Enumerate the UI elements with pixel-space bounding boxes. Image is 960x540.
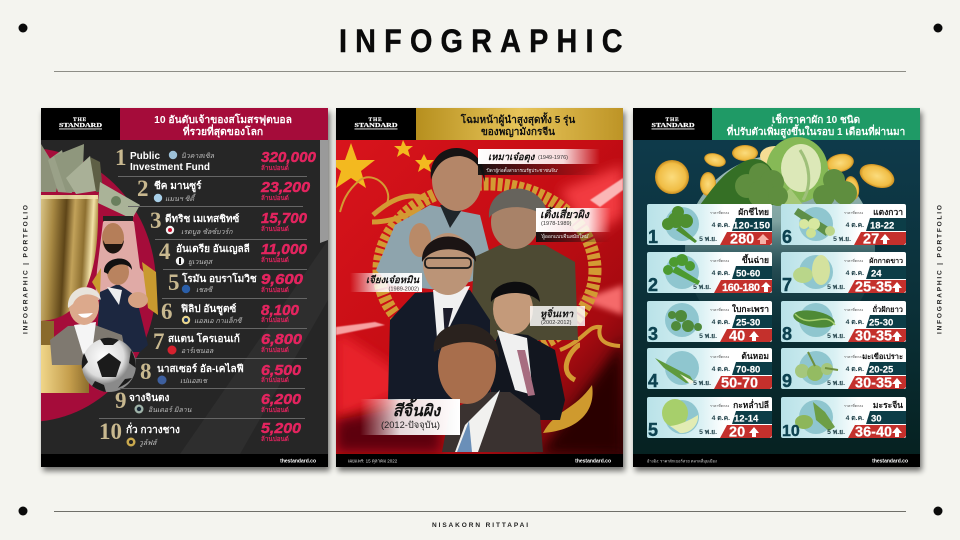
label: Hu: (2002-2012) <box>541 320 572 326</box>
row 2: ชีค มานซูร์ <box>154 180 202 193</box>
card 10: 5 พ.ย. <box>827 429 845 436</box>
golden dragon <box>340 177 620 380</box>
card 4 <box>647 348 772 392</box>
row 4: อันเดรีย อันเญลลี <box>176 243 250 255</box>
label: Deng <box>536 206 611 242</box>
header: ที่ปรับตัวเพิ่มสูงขึ้นในรอบ 1 เดือนที่ผ่านมา <box>727 124 905 139</box>
card 8: ราคาที่ตกลง <box>844 307 863 312</box>
card 9 <box>781 348 906 392</box>
label: Hu: หูจิ่นเทา <box>540 307 574 320</box>
row 10: ล้านปอนด์ <box>261 434 289 443</box>
row 1: Public <box>130 151 160 162</box>
row 1: 1 <box>115 145 126 170</box>
panel: vegetable prices <box>633 108 922 471</box>
header: ที่รวยที่สุดของโลก <box>183 124 263 139</box>
card 8: 5 พ.ย. <box>827 333 845 340</box>
footer: thestandard.co <box>575 458 611 464</box>
corner dot: top left <box>18 24 28 32</box>
row 7: อาร์เซนอล <box>181 346 214 355</box>
row 4 <box>159 239 307 266</box>
row 10: กั่ว กวางชาง <box>126 422 180 436</box>
author name: NISAKORN RITTAPAI <box>432 522 528 529</box>
row 7: ล้านปอนด์ <box>261 345 289 354</box>
label: Jiang <box>350 273 422 292</box>
row 6 <box>161 299 299 325</box>
row 3: เรดบูล ซัลซ์บวร์ก <box>181 227 233 236</box>
card 6: 27 <box>863 232 879 248</box>
row 4: 11,000 <box>261 242 307 258</box>
card 10 <box>781 397 906 440</box>
card 4: 70-80 <box>736 364 760 376</box>
card 5: 20 <box>729 424 745 440</box>
card 9: 20-25 <box>869 364 894 376</box>
card 2: 2 <box>648 275 658 295</box>
trophy cup <box>41 195 98 321</box>
broccoli <box>735 163 857 208</box>
row 10: วูล์ฟส์ <box>139 438 158 447</box>
row 9: ล้านปอนด์ <box>261 405 289 414</box>
card 9: ราคาที่ตกลง <box>844 354 863 359</box>
gold feather <box>543 385 593 433</box>
football <box>82 338 136 392</box>
footer: อ้างอิง: ราคาผักเบอร์สวย ตลาดสี่มุมเมือง <box>647 458 717 464</box>
card 8 <box>781 301 906 344</box>
money <box>41 144 140 219</box>
card 1: 1 <box>648 227 658 247</box>
row 1 <box>115 145 316 173</box>
flag stars <box>327 140 434 188</box>
owner: white hair <box>50 287 128 365</box>
footer <box>41 454 328 467</box>
header <box>41 108 328 140</box>
row 5 <box>168 270 303 295</box>
corner dot: top right <box>934 24 942 32</box>
row 7 <box>153 329 302 355</box>
row 3: 15,700 <box>261 211 307 227</box>
card 6: 18-22 <box>870 220 894 232</box>
card 4: 5 พ.ย. <box>693 380 711 387</box>
leader: Xi <box>434 324 543 452</box>
corner dot: bottom right <box>934 506 942 516</box>
leader: Jiang <box>388 233 490 400</box>
card 7: 25-35 <box>855 280 892 296</box>
row 8: 8 <box>140 359 152 384</box>
card 7 <box>781 252 906 296</box>
cabbage <box>766 137 828 203</box>
label: Hu <box>530 306 585 326</box>
card 9: 9 <box>782 371 792 391</box>
card 8: ถั่วฝักยาว <box>872 303 903 314</box>
row 6: 6 <box>161 299 172 324</box>
label: Deng: เติ้งเสี่ยวผิง <box>540 206 590 221</box>
title: INFOGRAPHIC <box>339 24 623 59</box>
card 9: 5 พ.ย. <box>827 380 845 387</box>
card 10: มะระจีน <box>873 400 903 410</box>
label: Mao: (1949-1976) <box>538 155 568 161</box>
card 3: 25-30 <box>736 318 760 328</box>
row 8: นาสเซอร์ อัล-เคไลฟี <box>157 362 244 375</box>
card 3: ใบกะเพรา <box>732 304 769 314</box>
card 5: ราคาที่ตกลง <box>710 403 729 408</box>
card 6: 5 พ.ย. <box>833 236 851 243</box>
row 8 <box>140 359 301 385</box>
row 7: สแตน โครเอนเก้ <box>168 332 240 345</box>
illustration: trophy, money and owners <box>41 144 158 422</box>
card 2 <box>647 252 772 295</box>
card 6: 4 ต.ค. <box>846 222 864 229</box>
row 2: 2 <box>137 176 148 201</box>
card 6: 6 <box>782 227 792 247</box>
logo <box>59 117 102 129</box>
card 10: 36-40 <box>855 424 892 440</box>
row 8: เปแอสเช <box>180 377 208 385</box>
ranking list <box>99 145 316 447</box>
footer <box>336 454 623 467</box>
card 2: 4 ต.ค. <box>712 270 730 277</box>
row 5: โรมัน อบราโมวิช <box>181 272 257 285</box>
owner: suit and applause <box>96 259 148 352</box>
footer: thestandard.co <box>872 458 908 464</box>
panel: five generations of Chinese leaders <box>327 108 625 471</box>
card 2: ราคาที่ตกลง <box>710 258 729 263</box>
card 1: 280 <box>730 232 754 248</box>
row 4: ล้านปอนด์ <box>261 255 289 264</box>
card 7: ผักกาดขาว <box>869 257 903 265</box>
logo: STANDARD <box>652 123 694 129</box>
card 1: 5 พ.ย. <box>699 236 717 243</box>
card 8: 8 <box>782 324 792 344</box>
label: Mao: เหมาเจ๋อตุง <box>488 152 536 163</box>
card 2: 160-180 <box>722 282 760 294</box>
card 5: กะหล่ำปลี <box>733 398 769 410</box>
card 5: 5 <box>648 420 658 440</box>
row 10 <box>99 419 301 447</box>
card 4: 4 <box>648 371 658 391</box>
footer: thestandard.co <box>280 458 316 464</box>
row 4: ยูเวนตุส <box>188 259 214 266</box>
row 1: Investment Fund <box>130 162 210 173</box>
label: Xi: สีจิ้นผิง <box>393 398 441 420</box>
card 9: 4 ต.ค. <box>846 366 864 373</box>
card 6 <box>781 204 906 248</box>
row 3 <box>150 208 307 236</box>
row 9: จางจินตง <box>129 392 170 404</box>
header <box>633 108 920 140</box>
row 5: 9,600 <box>261 272 303 288</box>
card 10: 4 ต.ค. <box>846 415 864 422</box>
card 4: ราคาที่ตกลง <box>710 354 729 359</box>
owner: keffiyeh <box>92 216 158 315</box>
row 7: 7 <box>153 329 164 354</box>
coins <box>655 145 898 201</box>
row 3: ล้านปอนด์ <box>261 224 289 233</box>
card 3: 5 พ.ย. <box>699 333 717 340</box>
illustration: vegetables and coins <box>655 137 894 302</box>
card 1: 120-150 <box>733 220 770 232</box>
label: Xi <box>360 398 460 435</box>
row 1: ล้านปอนด์ <box>261 163 289 172</box>
card 10: ราคาที่ตกลง <box>844 403 863 408</box>
card 4: 50-70 <box>721 376 758 392</box>
row 6: 8,100 <box>261 303 299 319</box>
label: Mao: 'บิดาผู้ก่อตั้งสาธารณรัฐประชาชนจีน' <box>486 167 558 174</box>
row 9: อินเตอร์ มิลาน <box>148 405 192 414</box>
row 5: ล้านปอนด์ <box>261 285 289 294</box>
card 7: 4 ต.ค. <box>846 270 864 277</box>
card 9: มะเขือเปราะ <box>862 352 903 361</box>
label: Deng: (1978-1989) <box>541 221 572 227</box>
card 3: 3 <box>648 324 658 344</box>
card 10: 30 <box>871 414 882 424</box>
label: Deng: 'ผู้ออกแบบจีนสมัยใหม่' <box>541 233 589 240</box>
card 4: 4 ต.ค. <box>712 366 730 373</box>
card 8: 30-35 <box>855 328 892 344</box>
trophy base <box>41 345 89 393</box>
card 1: ผักชีไทย <box>738 207 769 217</box>
card 3: 40 <box>729 328 745 344</box>
card 7: 7 <box>782 275 792 295</box>
illustration: flag and leaders <box>327 140 623 454</box>
card 8: 4 ต.ค. <box>846 319 864 326</box>
logo: THE <box>368 117 383 123</box>
label: Jiang: เจียงเจ๋อหมิน <box>366 274 419 286</box>
row 6: ฟิลิป อันชูตซ์ <box>181 303 236 316</box>
label: Jiang: (1989-2002) <box>389 286 419 292</box>
row 8: 6,500 <box>261 363 301 379</box>
panel: football club owners <box>0 108 330 471</box>
card 3 <box>647 301 772 344</box>
card 7: 24 <box>871 268 882 280</box>
leader: Hu <box>490 282 565 420</box>
side label: left: INFOGRAPHIC | PORTFOLIO <box>22 205 30 334</box>
card 3: ราคาที่ตกลง <box>710 307 729 312</box>
card 2: ขึ้นฉ่าย <box>742 253 769 265</box>
row 6: ล้านปอนด์ <box>261 315 289 324</box>
price cards <box>647 204 906 440</box>
row 3: ดีทริช เมเทสชิทซ์ <box>165 213 240 225</box>
row 9 <box>115 388 301 414</box>
row 9: 6,200 <box>261 392 301 408</box>
row 5: เชลซี <box>196 286 213 294</box>
logo: THE <box>73 117 87 123</box>
header <box>336 108 623 140</box>
row 2: ล้านปอนด์ <box>261 193 289 202</box>
footer <box>633 454 920 467</box>
logo: STANDARD <box>354 123 398 129</box>
logo: THE <box>665 117 680 123</box>
card 1: 4 ต.ค. <box>712 222 730 229</box>
row 10: 10 <box>99 419 122 444</box>
row 4: 4 <box>159 239 171 264</box>
side label: right: INFOGRAPHIC | PORTFOLIO <box>936 205 944 334</box>
greens <box>700 159 803 205</box>
label: Xi: (2012-ปัจจุบัน) <box>381 420 440 431</box>
card 2: 50-60 <box>736 268 760 280</box>
label: Mao <box>478 149 600 175</box>
row 9: 9 <box>115 388 126 413</box>
card 6: แตงกวา <box>873 207 903 217</box>
card 8: 25-30 <box>869 318 893 328</box>
card 7: 5 พ.ย. <box>827 284 845 291</box>
logo: STANDARD <box>59 123 102 129</box>
card 1: ราคาที่ตกลง <box>710 210 729 215</box>
leader: Deng <box>470 188 578 340</box>
row 3: 3 <box>150 208 162 233</box>
card 5: 5 พ.ย. <box>699 429 717 436</box>
corner dot: bottom left <box>18 506 28 516</box>
row 2: แมนฯ ซิตี้ <box>165 193 197 203</box>
footer: เผยแพร่: 15 ตุลาคม 2022 <box>348 458 398 464</box>
leader: Mao <box>376 148 495 290</box>
card 2: 5 พ.ย. <box>693 284 711 291</box>
row 1: 320,000 <box>261 150 316 166</box>
row 8: ล้านปอนด์ <box>261 375 289 384</box>
heading: เช็กราคาผัก 10 ชนิด <box>772 112 860 126</box>
heading: โฉมหน้าผู้นำสูงสุดทั้ง 5 รุ่น <box>460 112 575 127</box>
card 9: 30-35 <box>855 376 892 392</box>
row 6: แอลเอ กาแล็กซี <box>194 316 243 325</box>
card 6: ราคาที่ตกลง <box>844 210 863 215</box>
card 5: 4 ต.ค. <box>712 415 730 422</box>
card 10: 10 <box>782 423 800 440</box>
row 7: 6,800 <box>261 332 302 348</box>
card 5 <box>647 397 772 440</box>
logo <box>354 117 398 129</box>
heading: 10 อันดับเจ้าของสโมสรฟุตบอล <box>154 113 292 127</box>
row 10: 5,200 <box>261 421 301 437</box>
card 5: 12-14 <box>734 414 759 424</box>
row 2: 23,200 <box>260 180 310 196</box>
row 2 <box>137 176 310 203</box>
card 7: ราคาที่ตกลง <box>844 258 863 263</box>
row 1: นิวคาสเซิล <box>181 152 215 160</box>
card 3: 4 ต.ค. <box>712 319 730 326</box>
row 5: 5 <box>168 270 180 295</box>
card 4: ต้นหอม <box>741 351 769 361</box>
card 1 <box>647 204 772 248</box>
header: ของพญามังกรจีน <box>481 126 555 138</box>
logo <box>652 117 694 129</box>
